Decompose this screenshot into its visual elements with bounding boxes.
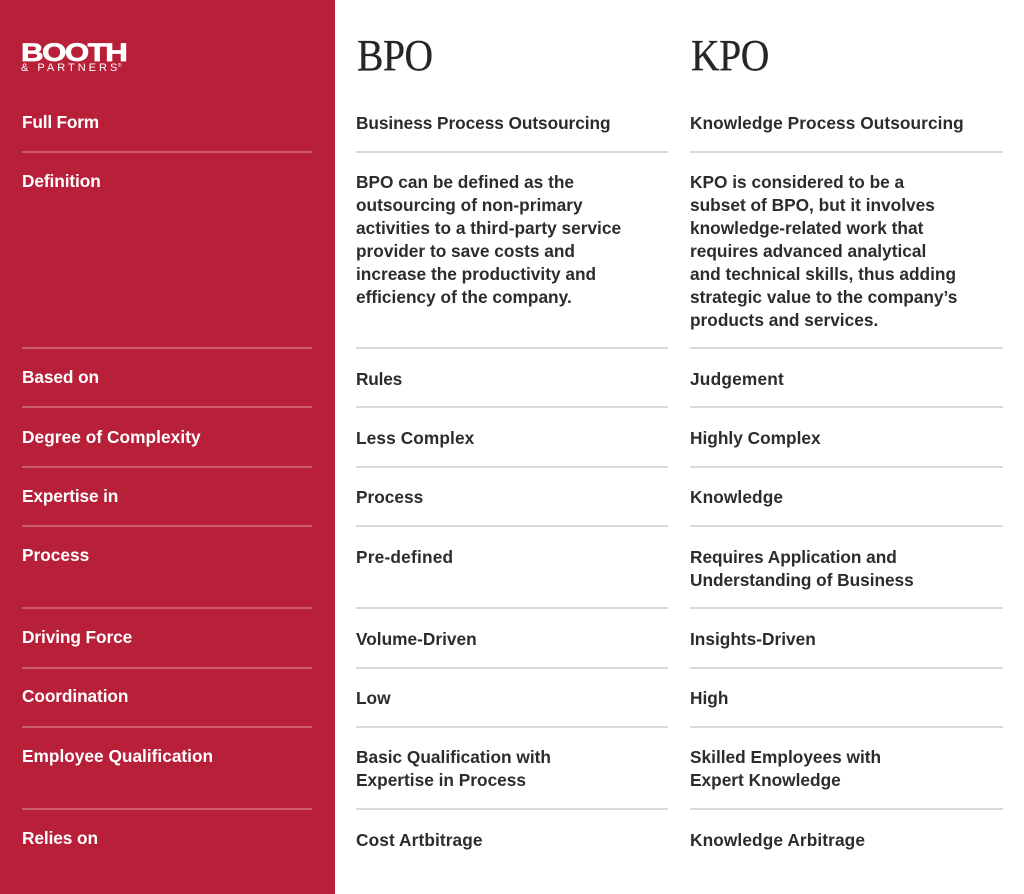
Relies on BPO: Cost Artbitrage bbox=[356, 830, 483, 850]
Process KPO: Requires Application and bbox=[690, 547, 897, 567]
Definition BPO: activities to a third-party service bbox=[356, 218, 621, 238]
Definition KPO: products and services. bbox=[690, 310, 878, 330]
row: Employee Qualification: Employee Qualification bbox=[22, 746, 213, 766]
Qualification KPO bbox=[690, 747, 881, 790]
Definition KPO: and technical skills, thus adding bbox=[690, 264, 956, 284]
Process BPO: Pre-defined bbox=[356, 547, 453, 567]
Relies on KPO: Knowledge Arbitrage bbox=[690, 830, 865, 850]
Full Form KPO: Knowledge Process Outsourcing bbox=[690, 113, 964, 133]
Qualification BPO: Basic Qualification with bbox=[356, 747, 551, 767]
Expertise KPO: Knowledge bbox=[690, 487, 783, 507]
Definition BPO: increase the productivity and bbox=[356, 264, 596, 284]
Qualification KPO: Skilled Employees with bbox=[690, 747, 881, 767]
Qualification KPO: Expert Knowledge bbox=[690, 770, 841, 790]
Expertise BPO: Process bbox=[356, 487, 423, 507]
row: Process: Process bbox=[22, 545, 89, 565]
row: Expertise in: Expertise in bbox=[22, 486, 118, 506]
Definition KPO: requires advanced analytical bbox=[690, 241, 926, 261]
Complexity KPO: Highly Complex bbox=[690, 428, 821, 448]
Definition KPO bbox=[690, 172, 957, 330]
Based on KPO: Judgement bbox=[690, 369, 784, 389]
Definition KPO: subset of BPO, but it involves bbox=[690, 195, 935, 215]
row: Coordination: Coordination bbox=[22, 686, 128, 706]
heading: BPO: BPO bbox=[357, 31, 433, 80]
Driving Force BPO: Volume-Driven bbox=[356, 629, 477, 649]
heading: KPO: KPO bbox=[691, 31, 769, 80]
row: Relies on: Relies on bbox=[22, 828, 98, 848]
Definition KPO: knowledge-related work that bbox=[690, 218, 923, 238]
row: Driving Force: Driving Force bbox=[22, 627, 132, 647]
row: Degree of Complexity: Degree of Complexity bbox=[22, 427, 201, 447]
Definition BPO: outsourcing of non-primary bbox=[356, 195, 583, 215]
logo: Booth & Partners: BOOTH bbox=[21, 38, 126, 66]
row: Definition: Definition bbox=[22, 171, 101, 191]
Qualification BPO: Expertise in Process bbox=[356, 770, 526, 790]
Coordination BPO: Low bbox=[356, 688, 391, 708]
Based on BPO: Rules bbox=[356, 369, 402, 389]
Process KPO bbox=[690, 547, 914, 590]
Full Form BPO: Business Process Outsourcing bbox=[356, 113, 610, 133]
Definition BPO: BPO can be defined as the bbox=[356, 172, 574, 192]
Complexity BPO: Less Complex bbox=[356, 428, 474, 448]
Definition BPO bbox=[356, 172, 621, 307]
Coordination KPO: High bbox=[690, 688, 728, 708]
logo: Booth & Partners: & PARTNERS® bbox=[21, 62, 121, 74]
Definition BPO: efficiency of the company. bbox=[356, 287, 572, 307]
Driving Force KPO: Insights-Driven bbox=[690, 629, 816, 649]
Process KPO: Understanding of Business bbox=[690, 570, 914, 590]
panel: red sidebar bbox=[0, 0, 335, 894]
Definition KPO: strategic value to the company’s bbox=[690, 287, 957, 307]
Definition KPO: KPO is considered to be a bbox=[690, 172, 904, 192]
row: Based on: Based on bbox=[22, 367, 99, 387]
Definition BPO: provider to save costs and bbox=[356, 241, 575, 261]
row: Full Form: Full Form bbox=[22, 112, 99, 132]
Qualification BPO bbox=[356, 747, 551, 790]
